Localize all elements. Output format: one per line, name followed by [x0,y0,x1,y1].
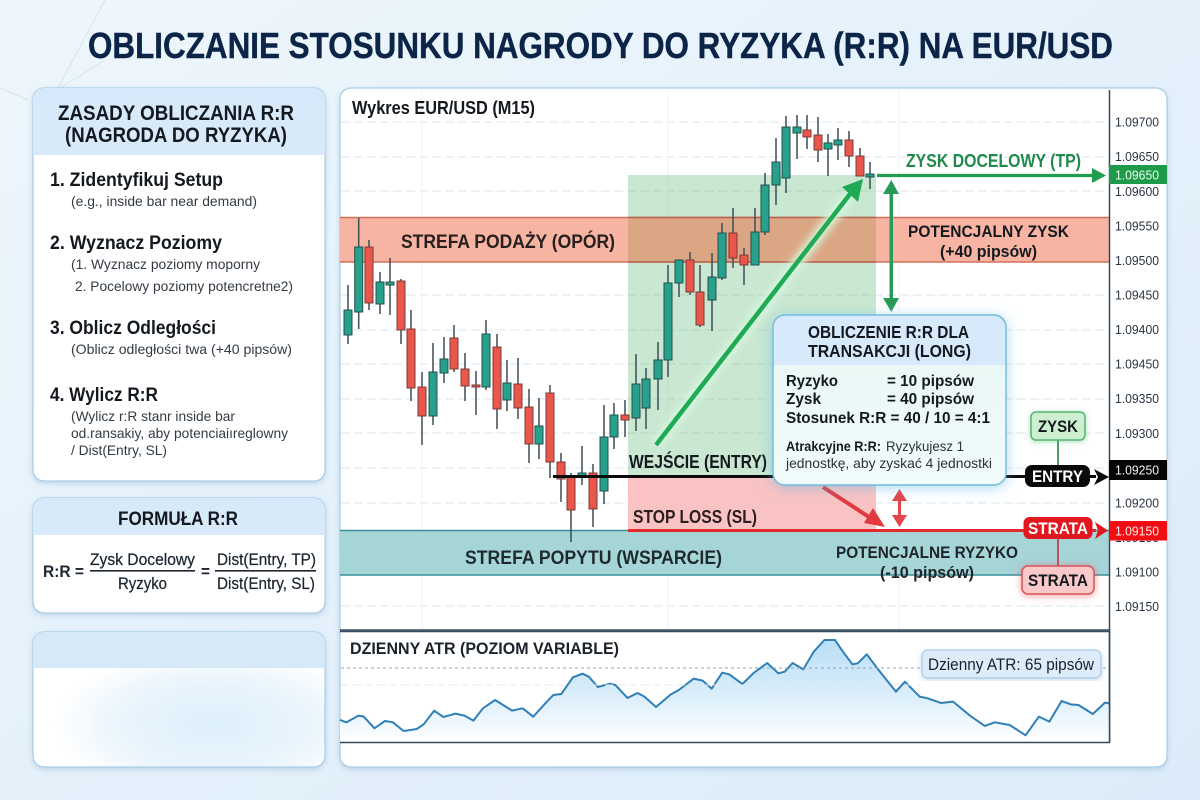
potential profit label: POTENCJALNY ZYSK [908,222,1070,241]
step 3 [50,318,292,357]
demand zone label: STREFA POPYTU (WSPARCIE) [465,548,722,569]
price axis labels: 1.09600 [1115,184,1159,199]
rules heading [58,102,294,147]
chart grid [341,90,1109,630]
reward area [628,175,876,477]
callout calculation rows: Ryzyko [786,373,838,390]
step 3: 3. Oblicz Odległości [50,318,216,339]
price axis labels: 1.09550 [1115,218,1159,234]
loss tag: STRATA [1028,571,1088,590]
ATR heading: DZIENNY ATR (POZIOM VARIABLE) [350,639,619,658]
ATR value label [922,650,1101,678]
entry pill and arrow: ENTRY [1032,467,1084,486]
take-profit arrow [877,168,1106,183]
step 4: 4. Wylicz R:R [50,385,158,406]
price axis line [340,90,1110,742]
loss tag [1022,566,1094,594]
formula: Zysk Docelowy [90,550,195,569]
entry label: WEJŚCIE (ENTRY) [629,451,767,472]
panel: rules for calculating R:R [33,88,325,481]
loss price tag: 1.09150 [1115,524,1159,538]
rules heading: ZASADY OBLICZANIA R:R [58,102,294,125]
demand zone [340,530,1109,575]
step 2: 2. Pocelowy poziomy potencretne2) [75,278,293,294]
formula: = [201,562,210,581]
callout heading: OBLICZENIE R:R DLA [808,322,969,342]
step 2 [50,233,293,294]
price axis labels: 1.09150 [1115,599,1159,614]
step 4: od.ransakiy, aby potenciaiıreglowny [71,425,288,441]
ATR chart [340,632,1110,742]
formula [43,550,316,593]
step 4: (Wylicz r:R stanr inside bar [71,408,235,424]
ATR area and line [340,640,1109,742]
step 1: (e.g., inside bar near demand) [71,193,257,209]
panel: empty card [33,632,325,767]
callout note: Ryzykujesz 1 [886,438,964,454]
step 2: 2. Wyznacz Poziomy [50,233,222,254]
callout note: jednostkę, aby zyskać 4 jednostki [785,455,992,471]
callout note: Atrakcyjne R:R: [786,438,881,454]
supply zone [340,217,1109,262]
entry pill and arrow [1025,465,1109,487]
potential risk label [836,543,1018,582]
price axis labels: 1.09200 [1115,496,1159,510]
potential risk label: (-10 pipsów) [880,563,974,582]
callout calculation rows [786,373,990,427]
price axis labels: 1.09350 [1115,391,1159,406]
callout calculation rows: Stosunek R:R = 40 / 10 = 4:1 [786,410,990,427]
stop-loss label: STOP LOSS (SL) [633,507,757,527]
loss price tag [1109,521,1167,540]
callout heading: TRANSAKCJI (LONG) [808,341,971,361]
risk arrow [823,487,885,527]
formula: Dist(Entry, TP) [217,550,316,569]
potential risk double arrow [892,489,907,527]
potential profit label [908,222,1070,261]
stop-loss line [628,529,1096,532]
loss connector [1057,539,1059,567]
entry price tag: 1.09250 [1115,462,1159,478]
risk area [628,477,876,530]
take-profit price tag [1109,165,1167,184]
profit tag: ZYSK [1038,417,1079,436]
price axis labels: 1.09500 [1115,253,1159,268]
arrow: entry to target [656,179,863,445]
step 1 [50,170,257,209]
price axis labels [1115,114,1159,614]
chart title: Wykres EUR/USD (M15) [352,98,535,118]
panel: main chart card [340,88,1167,767]
formula: R:R = [43,562,84,581]
price axis labels: 1.09150 [1115,530,1159,545]
panel: R:R formula [33,498,325,613]
loss pill and arrow [1024,517,1108,539]
ATR value label: Dzienny ATR: 65 pipsów [928,656,1094,674]
callout calculation rows: Zysk [786,391,821,408]
step 4 [50,385,288,458]
price axis labels: 1.09450 [1115,288,1159,302]
callout calculation rows: = 40 pipsów [887,391,975,408]
entry price tag [1109,460,1167,480]
step 2: (1. Wyznacz poziomy moporny [71,256,260,272]
candlesticks [344,115,874,542]
take-profit price tag: 1.09650 [1115,168,1159,182]
supply zone label: STREFA PODAŻY (OPÓR) [401,231,615,253]
potential risk label: POTENCJALNE RYZYKO [836,543,1018,562]
callout calculation rows: = 10 pipsów [887,373,975,390]
take-profit label: ZYSK DOCELOWY (TP) [906,151,1081,171]
formula: Ryzyko [118,574,167,593]
price axis labels: 1.09650 [1115,149,1159,164]
profit connector [1057,440,1059,466]
price axis labels: 1.09700 [1115,114,1159,130]
price axis labels: 1.09450 [1115,356,1159,372]
formula heading: FORMUŁA R:R [118,509,238,530]
calculation callout [773,315,1006,485]
price axis labels: 1.09300 [1115,426,1159,441]
step 3: (Oblicz odległości twa (+40 pipsów) [71,341,292,357]
callout note [785,438,992,471]
callout heading [808,322,971,361]
step 4: / Dist(Entry, SL) [71,442,167,458]
profit tag [1031,412,1085,440]
formula: Dist(Entry, SL) [217,574,315,593]
entry line [553,475,1096,478]
rules heading: (NAGRODA DO RYZYKA) [65,124,287,147]
price axis labels: 1.09400 [1115,322,1159,337]
step 1: 1. Zidentyfikuj Setup [50,170,223,191]
potential profit label: (+40 pipsów) [940,242,1037,261]
loss pill and arrow: STRATA [1028,519,1088,538]
price axis labels: 1.09100 [1115,564,1159,580]
potential profit double arrow [883,180,899,312]
